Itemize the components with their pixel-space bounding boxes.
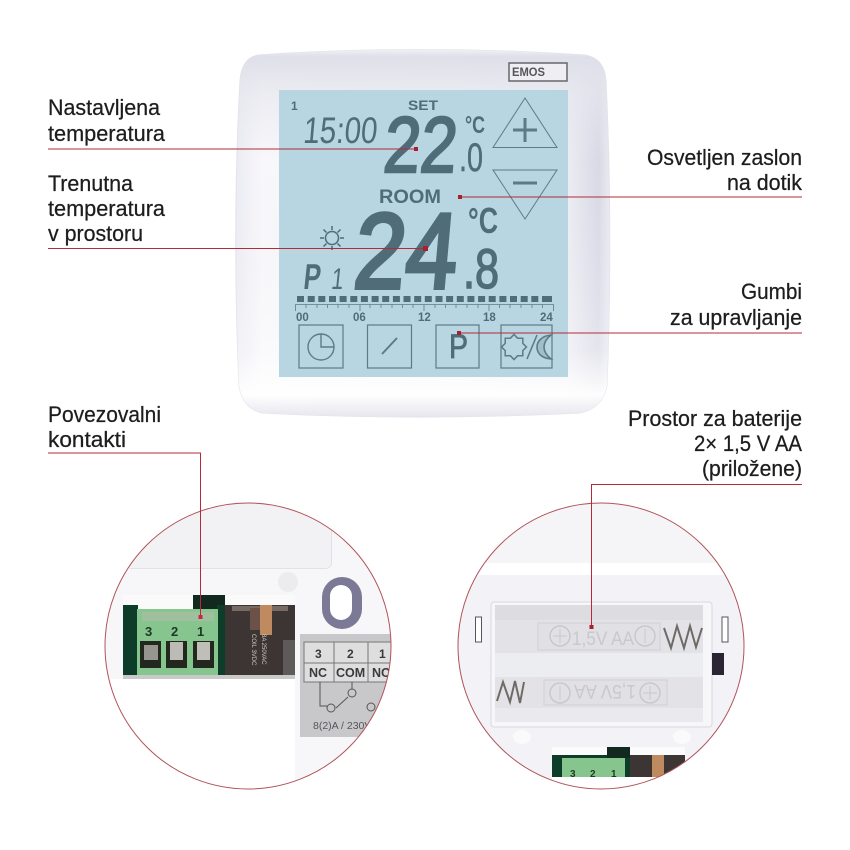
program number: 1 bbox=[291, 99, 298, 113]
label: Osvetljen zaslon na dotik: na dotik bbox=[727, 170, 803, 195]
wiring label: COM bbox=[336, 666, 365, 680]
pegs bbox=[513, 730, 691, 744]
embossed plate lower bbox=[544, 680, 667, 705]
battery bay bbox=[491, 602, 712, 727]
hour labels: 24 bbox=[540, 312, 553, 324]
embossed plate upper: 1,5V AA bbox=[572, 629, 634, 650]
24 hour program bar bbox=[297, 296, 552, 302]
label: Povezovalni kontakti bbox=[48, 402, 202, 619]
set temperature: 22 bbox=[380, 100, 461, 189]
wiring label bbox=[300, 634, 390, 737]
relay: COIL 3VDC bbox=[250, 634, 256, 666]
lower terminal preview: 3 bbox=[570, 769, 576, 780]
mounting slot bbox=[322, 577, 362, 629]
peg bbox=[278, 572, 298, 592]
label: Povezovalni kontakti: Povezovalni bbox=[48, 402, 161, 427]
EMOS logo: EMOS bbox=[512, 67, 545, 79]
label: Prostor za baterije: (priložene) bbox=[702, 456, 802, 481]
label: Nastavljena temperatura: temperatura bbox=[48, 121, 166, 146]
wiring label: NC bbox=[309, 666, 327, 680]
relay bbox=[225, 605, 295, 675]
label: Osvetljen zaslon na dotik: Osvetljen zaslon bbox=[647, 145, 802, 170]
label: Nastavljena temperatura: Nastavljena bbox=[48, 95, 161, 120]
hour labels bbox=[296, 312, 553, 324]
wiring label: 2 bbox=[347, 647, 354, 661]
wiring label: 1 bbox=[379, 647, 386, 661]
label: Trenutna temperatura v prostoru: v prostoru bbox=[48, 221, 143, 246]
label: Nastavljena temperatura bbox=[48, 95, 418, 151]
terminal bay bbox=[123, 595, 295, 679]
spring upper bbox=[664, 626, 702, 648]
program button bbox=[436, 325, 479, 368]
embossed plate upper bbox=[538, 623, 660, 650]
lower terminal preview: 2 bbox=[590, 769, 596, 780]
green terminal block bbox=[137, 609, 218, 675]
label: Gumbi za upravljanje: za upravljanje bbox=[670, 305, 802, 330]
hour ruler bbox=[296, 304, 554, 311]
wiring label: NO bbox=[372, 666, 391, 680]
clock button bbox=[299, 325, 343, 368]
icon: sun bbox=[320, 226, 344, 250]
green terminal block: 1 bbox=[197, 624, 204, 639]
day night button bbox=[501, 325, 552, 368]
left circle outline bbox=[105, 503, 391, 789]
label: Osvetljen zaslon na dotik bbox=[458, 145, 803, 199]
minus button bbox=[493, 170, 557, 219]
left detail circle: connection contacts bbox=[123, 504, 390, 737]
ROOM label: ROOM bbox=[379, 187, 441, 208]
hour labels: 18 bbox=[483, 312, 496, 324]
room temperature: 24 bbox=[350, 191, 463, 311]
hour labels: 12 bbox=[418, 312, 431, 324]
label: Povezovalni kontakti: kontakti bbox=[48, 427, 126, 452]
clock time: 15:00 bbox=[302, 109, 379, 151]
embossed plate lower: 1,5V AA bbox=[574, 680, 636, 701]
set temperature decimal: .0 bbox=[459, 136, 483, 180]
device housing bbox=[236, 50, 610, 417]
program number 1: 1 bbox=[330, 263, 345, 296]
dark slider bbox=[712, 653, 724, 675]
LCD screen bbox=[279, 90, 568, 377]
thermostat device bbox=[236, 50, 610, 417]
label: Gumbi za upravljanje: Gumbi bbox=[741, 279, 802, 304]
cover panel bbox=[100, 500, 331, 568]
right detail circle: battery compartment bbox=[458, 504, 744, 780]
room temperature decimal: .8 bbox=[463, 237, 499, 300]
hour labels: 06 bbox=[353, 312, 366, 324]
room degree unit: °C bbox=[468, 200, 498, 241]
edit button bbox=[368, 325, 412, 368]
spring lower bbox=[497, 681, 524, 703]
green terminal block: 3 bbox=[145, 624, 152, 639]
cover panel bbox=[455, 500, 755, 563]
label: Trenutna temperatura v prostoru bbox=[48, 171, 428, 251]
program button: P bbox=[449, 328, 468, 366]
green terminal block: 2 bbox=[171, 624, 178, 639]
SET label: SET bbox=[408, 97, 438, 113]
label: Prostor za baterije bbox=[590, 406, 802, 629]
lower terminal preview bbox=[552, 747, 685, 788]
set degree unit: °C bbox=[465, 112, 485, 139]
side clips bbox=[476, 617, 728, 642]
plus button bbox=[493, 98, 557, 148]
wiring label: 3 bbox=[315, 647, 322, 661]
label: Trenutna temperatura v prostoru: Trenutna bbox=[48, 171, 134, 196]
EMOS logo bbox=[509, 63, 567, 81]
relay: 8A 250VAC bbox=[260, 634, 266, 665]
label: Trenutna temperatura v prostoru: temperatura bbox=[48, 196, 166, 221]
label: Prostor za baterije: Prostor za baterije bbox=[628, 406, 802, 431]
label: Gumbi za upravljanje bbox=[457, 279, 802, 335]
lower terminal preview: 1 bbox=[611, 769, 617, 780]
hour labels: 00 bbox=[296, 312, 309, 324]
wiring label: 8(2)A / 230V bbox=[313, 720, 371, 732]
program P: P bbox=[302, 256, 323, 297]
white lower area bbox=[100, 679, 295, 799]
label: Prostor za baterije: 2× 1,5 V AA bbox=[694, 431, 802, 456]
right circle outline bbox=[458, 503, 744, 789]
